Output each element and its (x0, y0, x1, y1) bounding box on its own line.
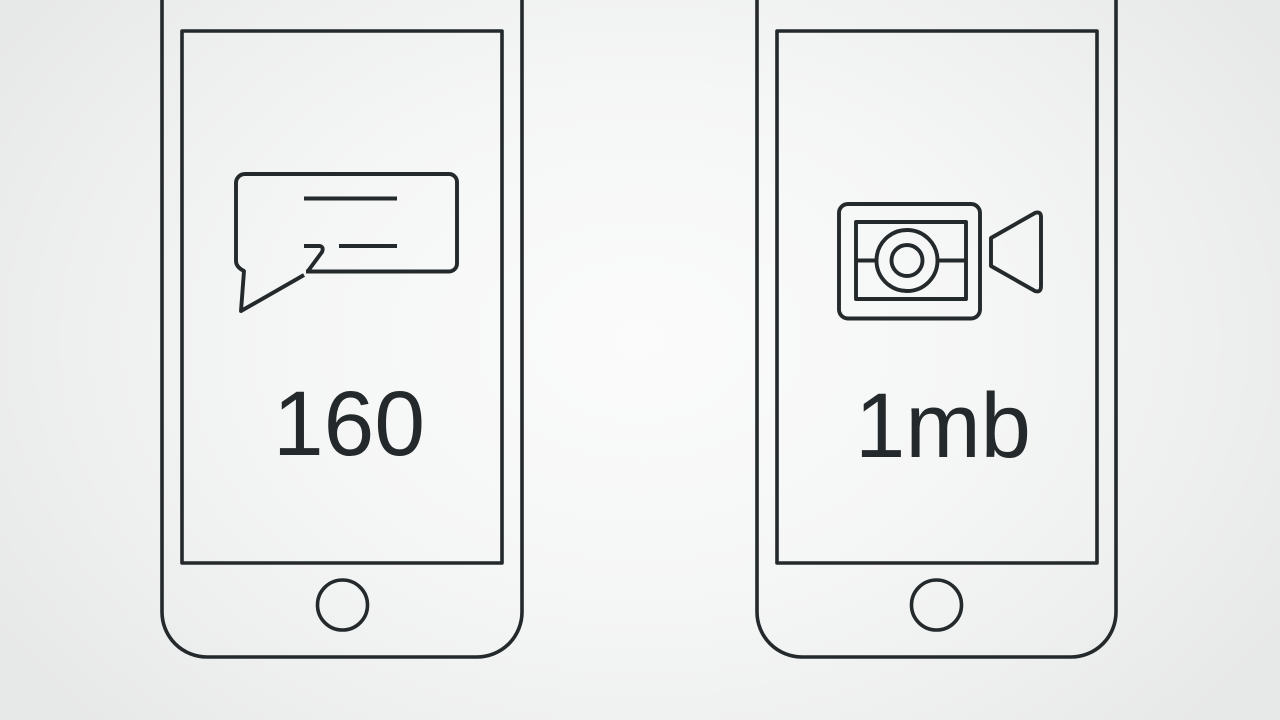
home button (318, 580, 368, 630)
phone screen (777, 31, 1097, 563)
number: 1mb: 1mb (855, 375, 1031, 477)
phone screen (182, 31, 502, 563)
icon: video camera (839, 204, 1041, 318)
icon: message bubble (236, 174, 457, 311)
phone body (162, 0, 522, 657)
panel: right phone (757, 0, 1116, 657)
panel: left phone (162, 0, 522, 657)
home button (912, 580, 962, 630)
phone body (757, 0, 1116, 657)
number: 160: 160 (273, 373, 425, 475)
